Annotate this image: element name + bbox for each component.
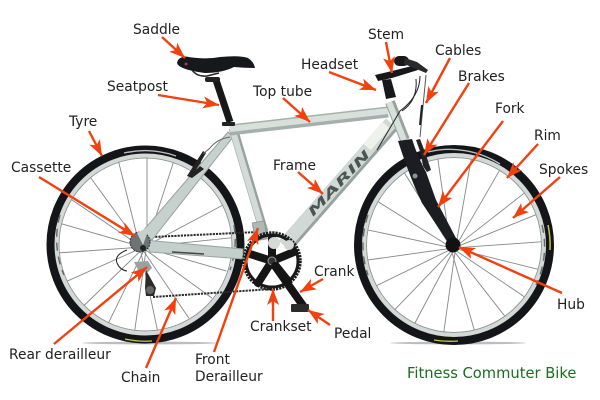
rear spokes [55,155,231,331]
rear wheel [50,150,240,344]
rear derailleur [134,261,156,296]
arrow: crank [300,279,323,292]
MARIN logo: MARIN [305,147,373,219]
label: Frame: Frame [273,158,316,174]
top tube [230,111,388,130]
seat tube [232,128,267,241]
label: Seatpost: Seatpost [107,79,168,95]
arrow: pedal [308,310,330,325]
pedal [291,304,309,312]
label: Chain: Chain [121,370,160,386]
label: Headset: Headset [301,57,359,73]
label: Tyre: Tyre [68,114,97,130]
arrow: rear derailleur [54,267,147,344]
label: Spokes: Spokes [539,162,588,178]
seat stay [142,132,233,240]
front wheel [358,149,550,344]
arrow: hub [459,247,562,293]
arrow: seatpost [158,95,219,105]
arrow: cables [426,58,450,103]
label: Cassette: Cassette [11,160,71,176]
label: Pedal: Pedal [334,326,371,342]
front spokes [366,158,541,333]
arrow: top tube [283,98,310,122]
arrow: cassette [39,177,135,236]
label: Rear derailleur: Rear derailleur [9,347,111,363]
arrow: rim [507,144,538,178]
chain stay [144,240,243,259]
arrow: headset [329,72,376,90]
label: Crank: Crank [314,264,355,280]
arrow: front derailleur [214,228,258,352]
arrow: fork [438,121,503,207]
rear brake [187,151,206,178]
arrow: chain [146,298,176,368]
cables [116,75,426,271]
arrow: spokes [513,177,560,218]
label: Cables: Cables [435,43,481,59]
label: Front Derailleur: Derailleur [195,369,263,385]
arrow: brakes [424,83,469,155]
label: Top tube: Top tube [252,84,312,100]
label: Rim: Rim [534,128,561,144]
stem and handlebar [375,56,428,81]
down tube [284,123,392,246]
front brake [416,139,431,172]
crankset [244,232,309,312]
arrow: tyre [89,131,102,156]
label: Hub: Hub [557,297,585,313]
arrows [39,37,562,368]
frame [142,102,405,259]
fork [398,139,457,244]
head tube [389,102,405,140]
arrow: stem [386,42,392,73]
title: Fitness Commuter Bike: Fitness Commuter Bike [407,365,576,382]
front hub [446,238,460,252]
headset [382,79,396,99]
arrow: frame [298,172,323,194]
arrow: crankset [272,289,274,321]
chain [152,232,272,297]
label: Saddle: Saddle [133,22,180,38]
seatpost [216,80,235,126]
label: Fork: Fork [495,101,525,117]
rear cassette [130,226,150,252]
label: Crankset: Crankset [250,319,312,335]
label: Stem: Stem [368,27,404,43]
arrow: saddle [162,37,185,58]
label: Brakes: Brakes [458,69,505,85]
label: Front Derailleur: Front [195,352,230,368]
saddle [177,56,255,82]
crank arm [275,266,304,307]
